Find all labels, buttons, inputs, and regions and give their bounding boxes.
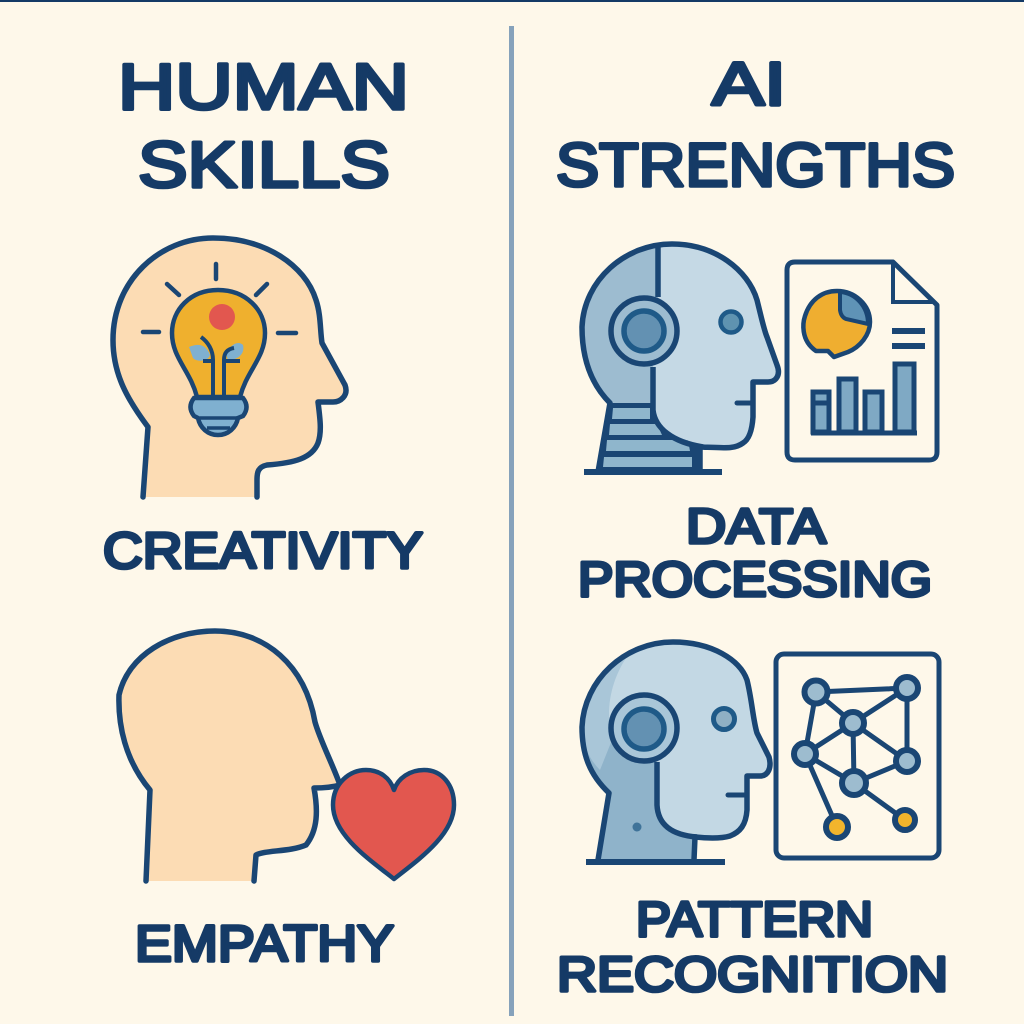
eye — [720, 312, 742, 332]
heading: human skills: HUMAN — [118, 50, 409, 123]
icon: human head with heart — [119, 631, 454, 881]
label: data processing — [578, 500, 932, 607]
heart — [333, 770, 454, 879]
ear — [611, 695, 677, 761]
label: pattern recognition — [557, 893, 948, 1002]
label: pattern recognition: PATTERN — [636, 893, 873, 947]
data report document — [787, 262, 937, 460]
label: creativity: CREATIVITY — [103, 522, 423, 579]
neck stripes — [598, 403, 700, 472]
label: empathy: EMPATHY — [135, 915, 394, 972]
head fill — [582, 244, 778, 472]
ear — [611, 298, 677, 364]
heading: human skills — [118, 50, 409, 201]
network panel — [776, 654, 939, 858]
head outline — [582, 244, 778, 472]
label: data processing: DATA — [686, 500, 826, 554]
center divider — [509, 26, 514, 1016]
heading: human skills: SKILLS — [138, 128, 390, 201]
light rays — [143, 264, 296, 333]
label: data processing: PROCESSING — [578, 553, 932, 607]
heading: ai strengths: STRENGTHS — [556, 131, 955, 199]
icon: ai head with network — [582, 642, 939, 862]
lightbulb — [172, 290, 265, 435]
icon: ai head with data report — [582, 244, 937, 472]
bar chart — [813, 364, 914, 432]
back of head — [582, 246, 658, 403]
heading: ai strengths: AI — [712, 50, 786, 118]
eye — [714, 708, 734, 730]
heading: ai strengths — [556, 50, 955, 199]
label: pattern recognition: RECOGNITION — [557, 948, 948, 1002]
pie chart — [803, 291, 870, 357]
icon: human head with lightbulb — [113, 238, 346, 497]
